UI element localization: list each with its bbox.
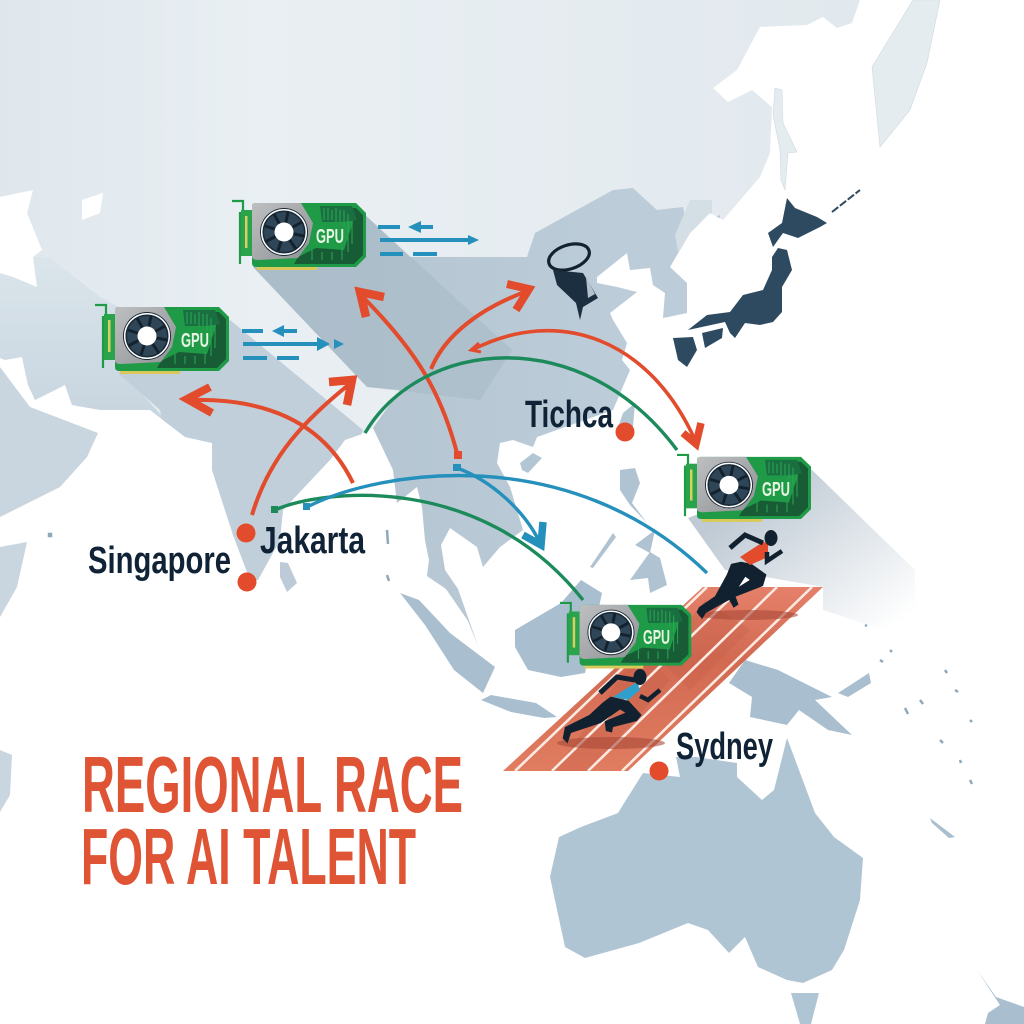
land: darker regions clipped to the coast bbox=[0, 188, 720, 660]
arrow: blue down bbox=[453, 464, 543, 545]
city: Jakarta: Jakarta bbox=[260, 520, 366, 562]
land: Borneo bbox=[515, 580, 602, 677]
GPU card: east: GPU bbox=[762, 479, 790, 501]
land: Sri Lanka bbox=[280, 562, 297, 592]
arrow: to north east bbox=[431, 284, 530, 369]
arrow: green to east GPU bbox=[365, 358, 677, 450]
city: Sydney bbox=[650, 726, 773, 780]
land: Sakhalin and Kamchatka bbox=[773, 0, 940, 190]
runner: blue singlet bbox=[564, 669, 660, 741]
title: FOR AI TALENT bbox=[81, 812, 416, 901]
runner: red singlet bbox=[698, 530, 782, 617]
arrow: blue long arc bbox=[303, 476, 707, 573]
land: Tasmania bbox=[791, 993, 819, 1024]
land: New Guinea bbox=[729, 660, 852, 735]
city: Singapore: Singapore bbox=[88, 540, 231, 582]
GPU card: north centre bbox=[232, 201, 366, 270]
arrow: two-way to east GPU bbox=[471, 331, 701, 444]
city: Jakarta bbox=[236, 520, 366, 562]
blue arrows bbox=[303, 464, 707, 573]
title: REGIONAL RACE bbox=[82, 740, 463, 829]
dark icon: ox with loop bbox=[545, 239, 598, 320]
land: Philippines bbox=[590, 468, 667, 593]
GPU shadow: east card bbox=[688, 470, 915, 640]
data-flow arrows: west GPU bbox=[242, 325, 344, 358]
arrow: green from south GPU bbox=[275, 495, 583, 600]
arrow: to north GPU bbox=[360, 292, 462, 459]
land: Taiwan and Hainan bbox=[520, 403, 635, 473]
land: Eurasia landmass bbox=[0, 0, 860, 646]
arrow: to west GPU bbox=[187, 387, 353, 483]
green arrows bbox=[271, 358, 677, 600]
land: Java bbox=[481, 695, 557, 718]
land: New Britain, New Caledonia, New Zealand bbox=[838, 673, 1024, 1024]
GPU card: south bbox=[560, 603, 691, 668]
land: Australia bbox=[550, 738, 863, 983]
arrow: to centre bbox=[252, 380, 352, 515]
running track bbox=[503, 587, 823, 771]
city: Sydney: Sydney bbox=[676, 726, 773, 768]
GPU card: east bbox=[677, 455, 811, 522]
land: Sumatra bbox=[400, 593, 495, 693]
city: Tichca: Tichca bbox=[525, 394, 614, 436]
land: Arabia and Africa bbox=[0, 367, 98, 812]
data-flow arrows: north GPU bbox=[378, 221, 479, 254]
arrow: green small head bbox=[271, 506, 278, 513]
land: Japan bbox=[673, 198, 827, 367]
GPU card: west: GPU bbox=[181, 330, 209, 352]
land: white inland seas bbox=[0, 190, 103, 287]
land: small islands bbox=[49, 530, 972, 784]
GPU card: west bbox=[95, 305, 229, 374]
title bbox=[81, 740, 463, 901]
red arrows bbox=[187, 284, 701, 515]
GPU card: north centre: GPU bbox=[316, 226, 344, 248]
GPU card: south: GPU bbox=[643, 627, 670, 649]
